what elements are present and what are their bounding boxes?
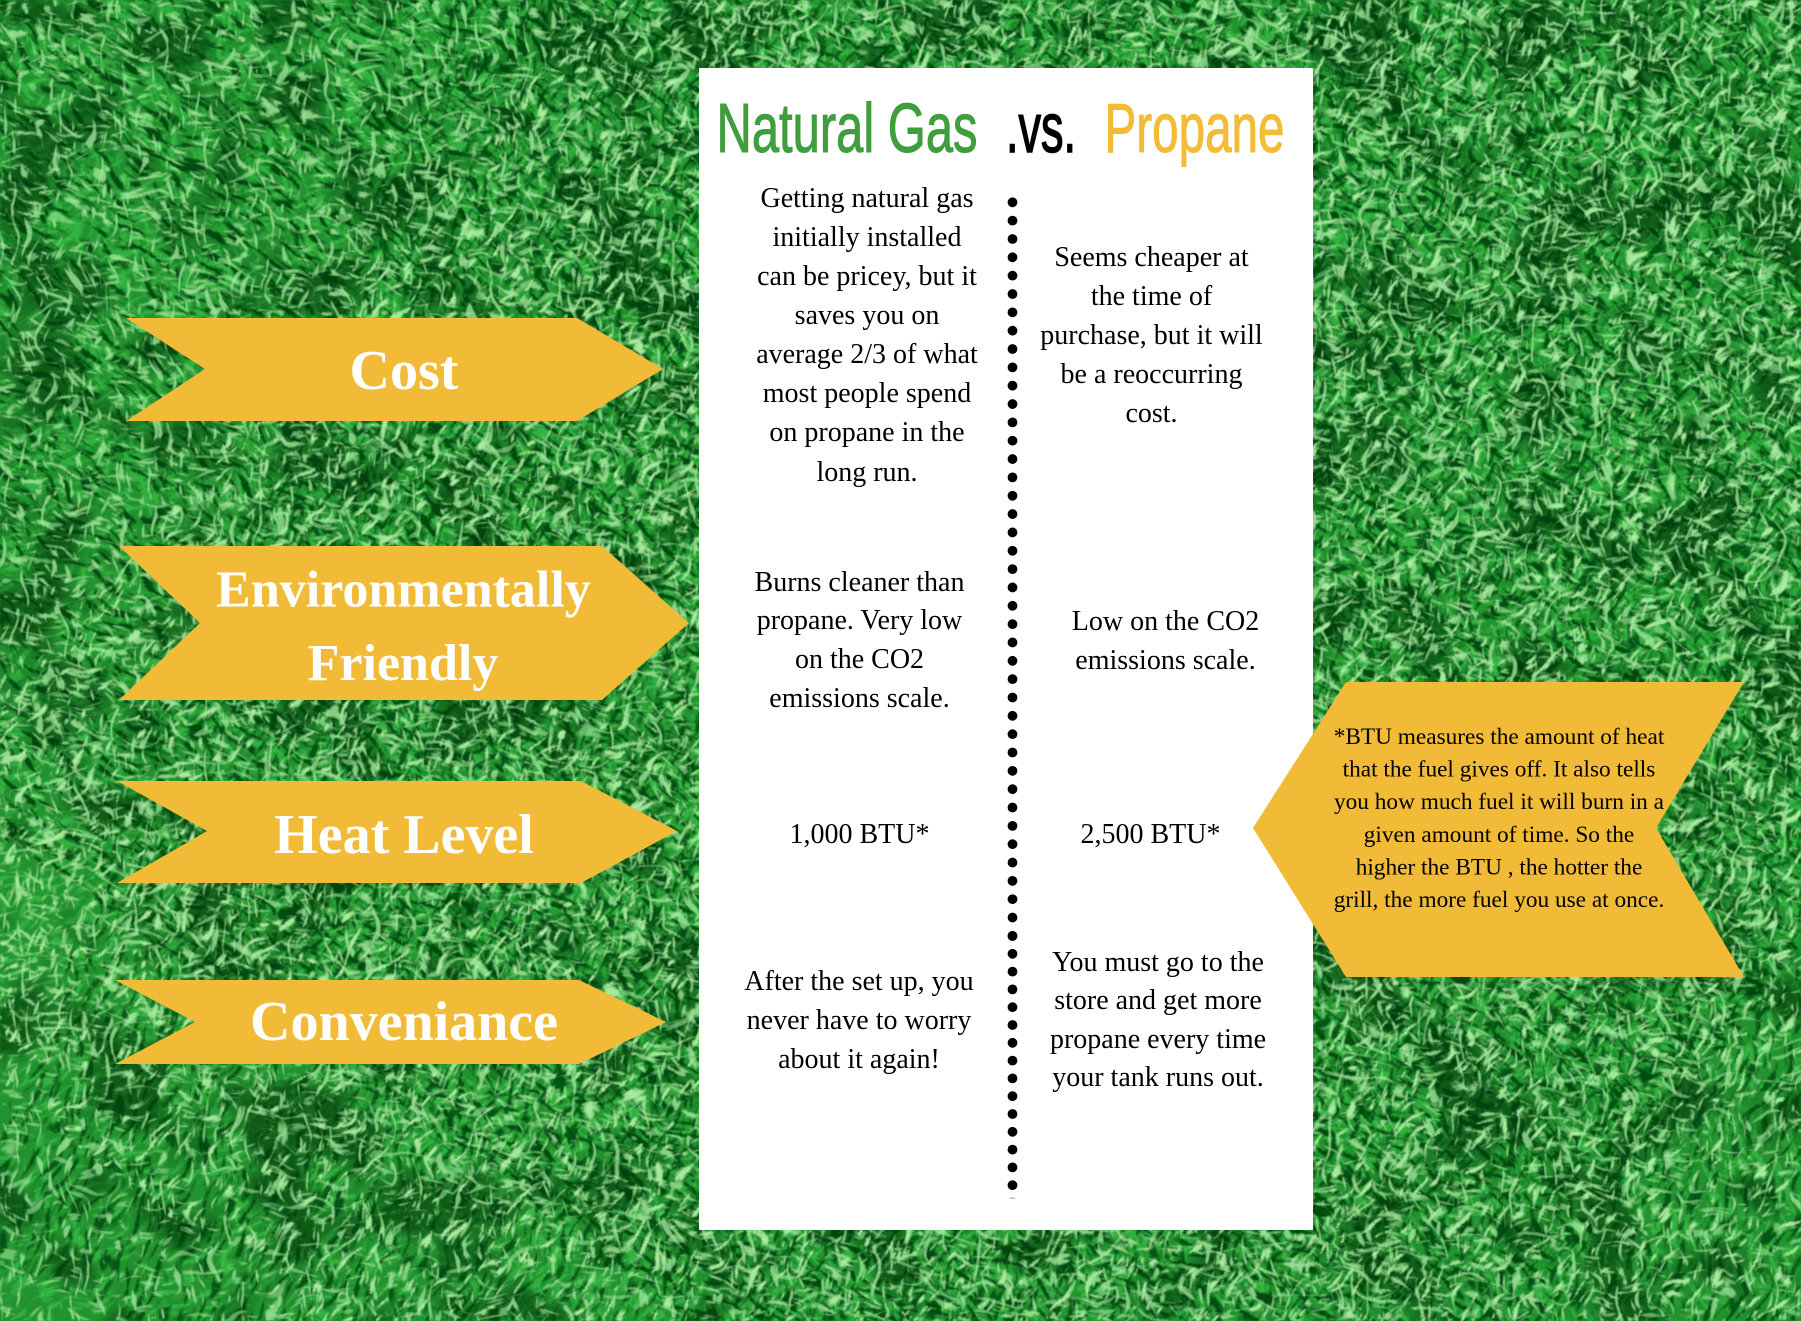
heading: Propane: Propane bbox=[1104, 89, 1284, 167]
text: propane environment bbox=[1072, 606, 1259, 676]
text: natural gas convenience: never have to worry bbox=[747, 1005, 971, 1036]
text: propane environment: Low on the CO2 bbox=[1072, 606, 1259, 637]
text: natural gas environment: emissions scale. bbox=[769, 683, 950, 714]
text: natural gas environment: on the CO2 bbox=[795, 644, 924, 675]
text: natural gas environment: Burns cleaner than bbox=[755, 567, 964, 598]
text: natural gas cost: can be pricey, but it bbox=[757, 261, 977, 292]
text: propane convenience: store and get more bbox=[1054, 985, 1262, 1016]
callout: BTU explanation bbox=[1253, 682, 1744, 977]
text: natural gas cost: Getting natural gas bbox=[760, 183, 974, 214]
arrow label: Environmentally Friendly bbox=[119, 546, 689, 700]
text: propane cost: cost. bbox=[1125, 398, 1178, 429]
text: natural gas heat level: 1,000 BTU* bbox=[790, 819, 930, 850]
arrow label: Environmentally Friendly: Environmentally bbox=[216, 562, 591, 618]
arrow label: Environmentally Friendly: Friendly bbox=[308, 635, 498, 692]
text: propane heat level: 2,500 BTU* bbox=[1080, 819, 1220, 850]
arrow label: Heat Level: Heat Level bbox=[274, 804, 534, 866]
text: natural gas cost: average 2/3 of what bbox=[756, 339, 978, 370]
text: natural gas cost: initially installed bbox=[773, 222, 961, 253]
callout: BTU explanation: you how much fuel it will burn in a bbox=[1334, 789, 1665, 815]
heading: .vs.: .vs. bbox=[1006, 89, 1076, 167]
text: natural gas cost: long run. bbox=[816, 457, 918, 488]
callout: BTU explanation: that the fuel gives off. It also tells bbox=[1343, 756, 1655, 782]
heading: Natural Gas: Natural Gas bbox=[716, 89, 978, 167]
text: natural gas environment: propane. Very low bbox=[757, 605, 963, 636]
dotted divider bbox=[1010, 202, 1015, 1199]
text: propane convenience bbox=[1050, 947, 1266, 1093]
title: Natural Gas vs. Propane bbox=[716, 89, 1284, 167]
arrow label: Conveniance: Conveniance bbox=[250, 991, 558, 1053]
text: natural gas cost: most people spend bbox=[763, 378, 971, 409]
arrow label: Cost: Cost bbox=[350, 340, 459, 402]
text: propane cost bbox=[1040, 242, 1263, 429]
text: natural gas environment bbox=[755, 567, 964, 714]
text: propane environment: emissions scale. bbox=[1075, 645, 1256, 676]
text: propane cost: the time of bbox=[1091, 281, 1213, 312]
callout: BTU explanation: grill, the more fuel you use at once. bbox=[1334, 887, 1664, 913]
text: natural gas convenience bbox=[744, 966, 974, 1075]
text: propane cost: purchase, but it will bbox=[1040, 320, 1263, 351]
text: propane cost: be a reoccurring bbox=[1061, 359, 1242, 390]
text: propane convenience: your tank runs out. bbox=[1052, 1062, 1264, 1093]
text: propane convenience: You must go to the bbox=[1052, 947, 1264, 978]
arrow label: Conveniance bbox=[115, 980, 666, 1064]
arrow label: Heat Level bbox=[117, 781, 677, 883]
text: natural gas cost: saves you on bbox=[795, 300, 939, 331]
panel: comparison card bbox=[699, 68, 1313, 1230]
text: propane cost: Seems cheaper at bbox=[1054, 242, 1249, 273]
text: natural gas cost bbox=[756, 183, 978, 488]
callout: BTU explanation: *BTU measures the amount of heat bbox=[1334, 724, 1665, 750]
arrow label: Cost bbox=[126, 318, 663, 421]
text: propane convenience: propane every time bbox=[1050, 1024, 1266, 1055]
text: natural gas convenience: After the set up, you bbox=[744, 966, 974, 997]
text: natural gas cost: on propane in the bbox=[769, 417, 965, 448]
text: natural gas convenience: about it again! bbox=[778, 1044, 940, 1075]
callout: BTU explanation: given amount of time. So the bbox=[1364, 822, 1634, 848]
callout: BTU explanation: higher the BTU , the hotter the bbox=[1356, 854, 1642, 880]
